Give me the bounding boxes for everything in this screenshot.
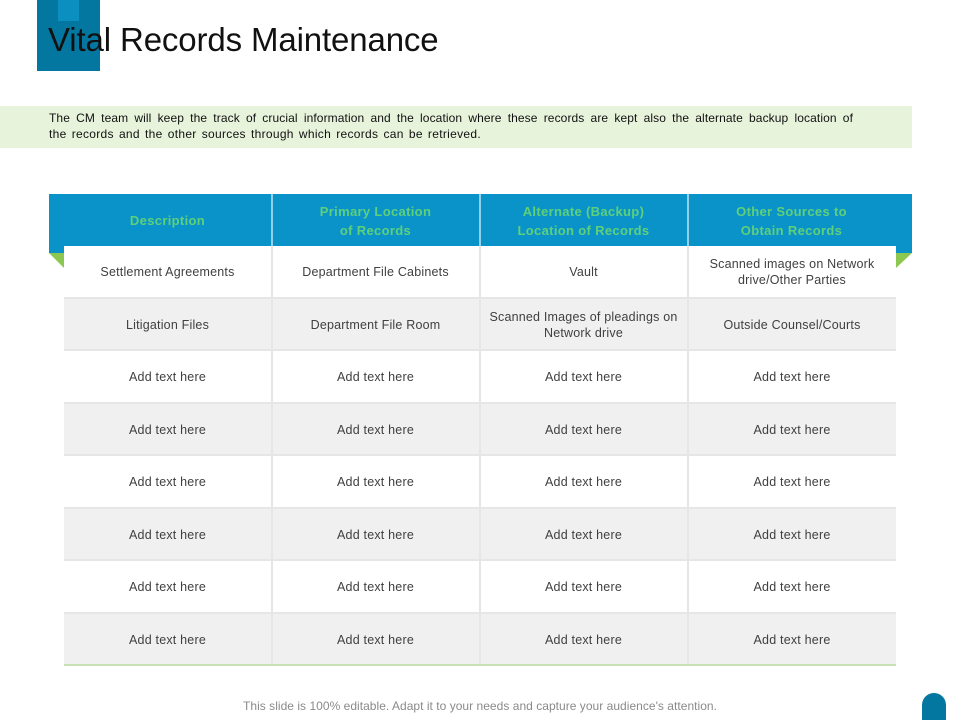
header: other sources: [736, 204, 847, 238]
table row 8: [64, 614, 896, 666]
table row 4: Add text here: [754, 423, 830, 437]
intro band: [0, 106, 912, 148]
table row 4: Add text here: [337, 423, 414, 437]
header: alternate location: [518, 204, 649, 238]
table row 1: Scanned images on Network drive/Other Parties: [710, 257, 874, 287]
table row 7: [64, 561, 896, 614]
table row 2: Scanned Images of pleadings on Network drive: [489, 310, 678, 340]
table row 5: Add text here: [754, 475, 830, 489]
table row 3: Add text here: [337, 370, 414, 384]
table row 6: Add text here: [337, 528, 414, 542]
table row 5: [64, 456, 896, 508]
table row 7: Add text here: [337, 580, 414, 594]
table row 7: Add text here: [129, 580, 206, 594]
header: primary location: of Records: [340, 222, 411, 238]
table row 2: Outside Counsel/Courts: [723, 318, 861, 332]
header: primary location: Primary Location: [320, 204, 431, 218]
title: Vital Records Maintenance: [48, 21, 439, 58]
table row 2: Litigation Files: [126, 318, 209, 332]
table row 1: Vault: [569, 265, 598, 279]
table row 1: Settlement Agreements: [100, 265, 235, 279]
table row 5: Add text here: [337, 475, 414, 489]
corner tab: [922, 693, 946, 720]
table row 7: Add text here: [754, 580, 830, 594]
inner accent square: [58, 0, 79, 21]
table row 2: Department File Room: [311, 318, 440, 332]
table row 4: Add text here: [129, 423, 206, 437]
table row 6: Add text here: [129, 528, 206, 542]
header: primary location: [320, 204, 431, 238]
table row 3: [64, 351, 896, 404]
table row 1: [64, 246, 896, 298]
header: other sources: Obtain Records: [741, 222, 842, 238]
table row 3: Add text here: [129, 370, 206, 384]
table row 4: [64, 404, 896, 456]
table row 8: Add text here: [129, 633, 206, 647]
table row 8: Add text here: [754, 633, 830, 647]
intro text: the records and the other sources through which records can be retrieved.: [49, 127, 481, 141]
table row 8: Add text here: [545, 633, 622, 647]
table row 5: Add text here: [129, 475, 206, 489]
header: alternate location: Location of Records: [518, 222, 649, 238]
table row 3: Add text here: [754, 370, 830, 384]
header: other sources: Other Sources to: [736, 204, 847, 218]
footer note: This slide is 100% editable. Adapt it to your needs and capture your audience's attention.: [243, 699, 717, 713]
header divider 1: [271, 194, 273, 246]
table row 3: Add text here: [545, 370, 622, 384]
intro text: The CM team will keep the track of crucial information and the location where these records are kept also the alternate backup location of: [49, 111, 853, 125]
intro text: [49, 111, 853, 141]
header divider 3: [687, 194, 689, 246]
left ribbon fold: [49, 253, 64, 268]
table row 4: Add text here: [545, 423, 622, 437]
table row 7: Add text here: [545, 580, 622, 594]
table row 1: Department File Cabinets: [302, 265, 449, 279]
table row 6: Add text here: [754, 528, 830, 542]
header: alternate location: Alternate (Backup): [523, 204, 644, 218]
table row 2: [64, 298, 896, 351]
table row 6: [64, 508, 896, 561]
table row 6: Add text here: [545, 528, 622, 542]
header: description: Description: [130, 213, 205, 228]
title accent square: [37, 0, 100, 71]
table row 5: Add text here: [545, 475, 622, 489]
table row 8: Add text here: [337, 633, 414, 647]
right ribbon fold: [896, 253, 912, 268]
header divider 2: [479, 194, 481, 246]
table header background: [49, 194, 912, 253]
